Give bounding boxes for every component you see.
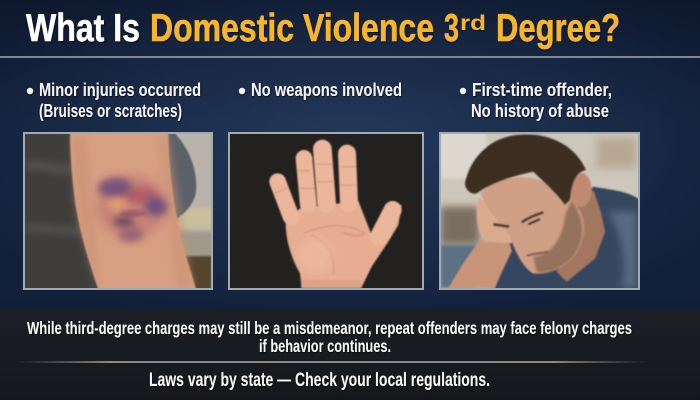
warning note: if behavior continues. [259,336,391,356]
title: rd [460,12,486,35]
state laws note: Laws vary by state — Check your local regulations. [149,369,490,391]
photo: open hand [228,132,424,290]
title: 3 [444,7,459,50]
bullet: minor injuries: Minor injuries occurred [39,79,201,100]
title: Domestic Violence [150,7,434,50]
bullet: no weapons: No weapons involved [251,79,402,100]
bullet: first-time offender: No history of abuse [471,100,609,121]
photo: bruised arm [23,132,213,295]
bullet: minor injuries [27,79,201,121]
warning note [27,318,632,356]
photo: distressed man [439,132,640,292]
bottom band [0,309,700,400]
title: What Is [26,7,140,50]
bullet: minor injuries: (Bruises or scratches) [39,100,182,121]
title: Degree? [496,7,620,50]
bullet: first-time offender: First-time offender, [472,79,612,100]
title [26,7,620,50]
bullet: first-time offender [460,79,612,121]
